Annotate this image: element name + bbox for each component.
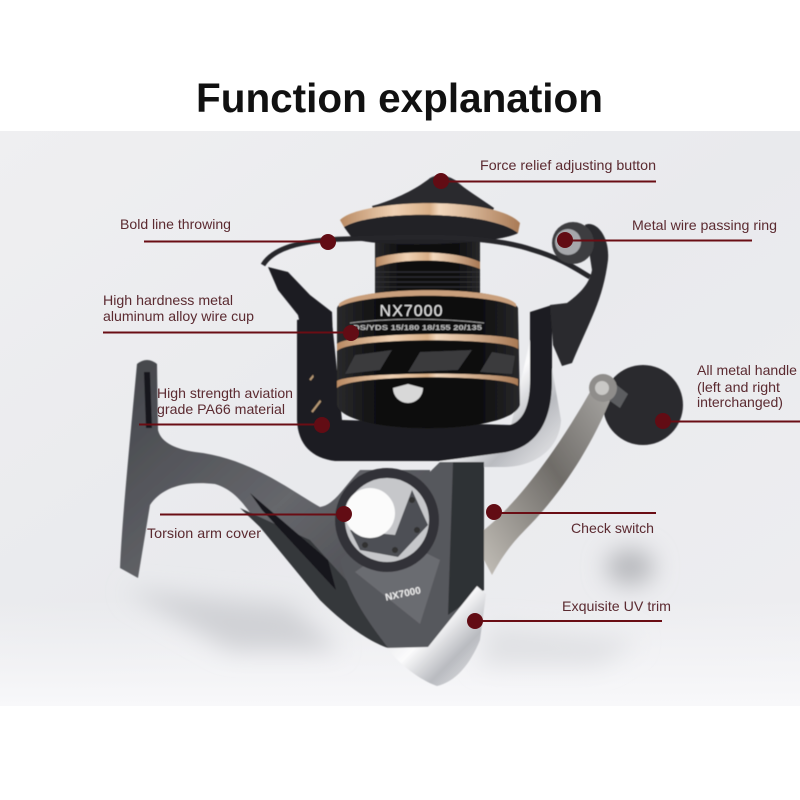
handle arm and knob [484, 365, 683, 575]
callout: force relief adjusting button [433, 157, 656, 189]
callout: PA66 material [139, 385, 330, 433]
title: Function explanation [196, 75, 603, 121]
bail wire [263, 237, 590, 277]
callout: metal wire passing ring [557, 217, 777, 248]
fishing reel illustration [120, 175, 683, 686]
callout: exquisite UV trim: Exquisite UV trim [562, 598, 671, 614]
line capacity text: DS/YDS 15/180 18/155 20/135 [353, 325, 482, 332]
reel body [337, 290, 520, 428]
callout: exquisite UV trim [467, 598, 671, 629]
callout: check switch: Check switch [571, 520, 654, 536]
callout: check switch [486, 504, 656, 536]
callout: torsion arm cover: Torsion arm cover [147, 525, 261, 541]
side housing [335, 462, 484, 648]
spool cap and flange [340, 175, 520, 294]
callout: high hardness metal wire cup [103, 292, 359, 341]
left bail arm [268, 267, 336, 420]
callout: force relief adjusting button: Force relief adjusting button [480, 157, 656, 173]
callout: PA66 material: grade PA66 material [157, 401, 285, 417]
silver UV tail [387, 586, 486, 686]
rotor frame with silver back [297, 305, 561, 467]
callout: bold line throwing: Bold line throwing [120, 216, 231, 232]
callout: metal wire passing ring: Metal wire passing ring [632, 217, 777, 233]
callout: high hardness metal wire cup: aluminum alloy wire cup [103, 308, 254, 324]
callout: PA66 material: High strength aviation [157, 385, 293, 401]
callout: bold line throwing [120, 216, 336, 250]
reel model text: NX7000 [380, 303, 443, 320]
housing model text: NX7000 [384, 585, 422, 604]
callout: high hardness metal wire cup: High hardness metal [103, 292, 233, 308]
foot and arm [120, 360, 440, 648]
callout: all metal handle: All metal handle [697, 362, 797, 378]
photo background panel [0, 131, 800, 706]
callout: torsion arm cover [147, 506, 352, 541]
right bail arm and ring [550, 222, 608, 366]
floor shadows [0, 549, 800, 706]
callout: all metal handle: (left and right [697, 379, 780, 395]
callout: all metal handle [655, 362, 800, 429]
callout: all metal handle: interchanged) [697, 394, 783, 410]
